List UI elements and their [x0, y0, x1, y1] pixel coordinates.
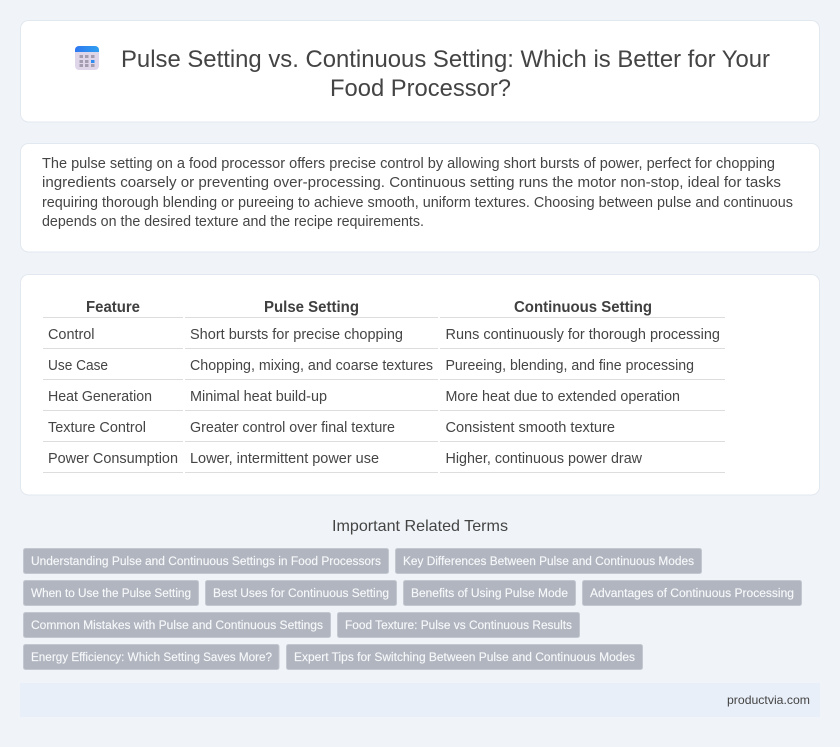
tag: Common Mistakes with Pulse and Continuous Settings [31, 618, 323, 632]
tag [582, 580, 802, 606]
table row: heat generation: Heat Generation [48, 389, 152, 405]
related term tags [24, 548, 802, 670]
tag [24, 548, 388, 574]
footer source: productvia.com [727, 693, 810, 707]
title: Pulse Setting vs. Continuous Setting: Which is Better for Your [121, 46, 770, 73]
table row: control: Short bursts for precise chopping [190, 327, 403, 343]
footer [20, 683, 820, 717]
text block: introduction: requiring thorough blending or pureeing to achieve smooth, uniform textures. Choosing between pulse and continuous [42, 195, 793, 211]
panel: introduction [20, 144, 820, 252]
table row: heat generation [48, 389, 680, 405]
text block: introduction: The pulse setting on a food processor offers precise control by allowing short bursts of power, perfect for chopping [42, 156, 775, 172]
tag [206, 580, 396, 606]
tag [396, 548, 702, 574]
tag [24, 580, 198, 606]
tag [338, 612, 580, 638]
table row: use case: Use Case [48, 358, 108, 374]
table rules [43, 318, 725, 472]
table row: power consumption [48, 451, 643, 467]
tag: Key Differences Between Pulse and Continuous Modes [403, 554, 694, 568]
title [121, 46, 770, 102]
title: Food Processor? [330, 75, 511, 102]
table row: control: Runs continuously for thorough processing [446, 327, 720, 343]
table header: Continuous Setting [514, 299, 652, 316]
panel: comparison table [20, 274, 820, 495]
table header [86, 299, 652, 316]
table row: power consumption: Lower, intermittent power use [190, 451, 379, 467]
table row: control [48, 327, 720, 343]
tag: Advantages of Continuous Processing [590, 586, 794, 600]
table row: use case: Pureeing, blending, and fine processing [446, 358, 694, 374]
table row: texture control: Consistent smooth texture [446, 420, 615, 436]
table row: control: Control [48, 327, 94, 343]
text block: introduction: depends on the desired texture and the recipe requirements. [42, 214, 424, 230]
table row: texture control: Texture Control [48, 420, 146, 436]
table header: Feature [86, 299, 140, 316]
tag: Food Texture: Pulse vs Continuous Results [345, 618, 572, 632]
icon: calendar [75, 46, 99, 70]
table row: texture control [48, 420, 615, 436]
table row: use case: Chopping, mixing, and coarse textures [190, 358, 433, 374]
text block: introduction [42, 156, 793, 230]
panel: header [20, 20, 820, 122]
table row: heat generation: Minimal heat build-up [190, 389, 327, 405]
table header: Pulse Setting [264, 299, 359, 316]
table row: texture control: Greater control over final texture [190, 420, 395, 436]
table row: power consumption: Higher, continuous power draw [446, 451, 643, 467]
table row: heat generation: More heat due to extended operation [446, 389, 680, 405]
text block: introduction: ingredients coarsely or preventing over-processing. Continuous setting runs the motor non-stop, ideal for tasks [42, 175, 781, 191]
table row: power consumption: Power Consumption [48, 451, 178, 467]
heading: important related terms: Important Related Terms [332, 518, 508, 535]
tag: Expert Tips for Switching Between Pulse and Continuous Modes [294, 650, 635, 664]
tag: Best Uses for Continuous Setting [213, 586, 389, 600]
tag: Benefits of Using Pulse Mode [411, 586, 568, 600]
tag: Understanding Pulse and Continuous Settings in Food Processors [31, 554, 381, 568]
tag [24, 644, 279, 670]
tag [404, 580, 576, 606]
tag [24, 612, 330, 638]
tag [286, 644, 642, 670]
tag: When to Use the Pulse Setting [31, 586, 191, 600]
tag: Energy Efficiency: Which Setting Saves More? [31, 650, 272, 664]
table row: use case [48, 358, 694, 374]
